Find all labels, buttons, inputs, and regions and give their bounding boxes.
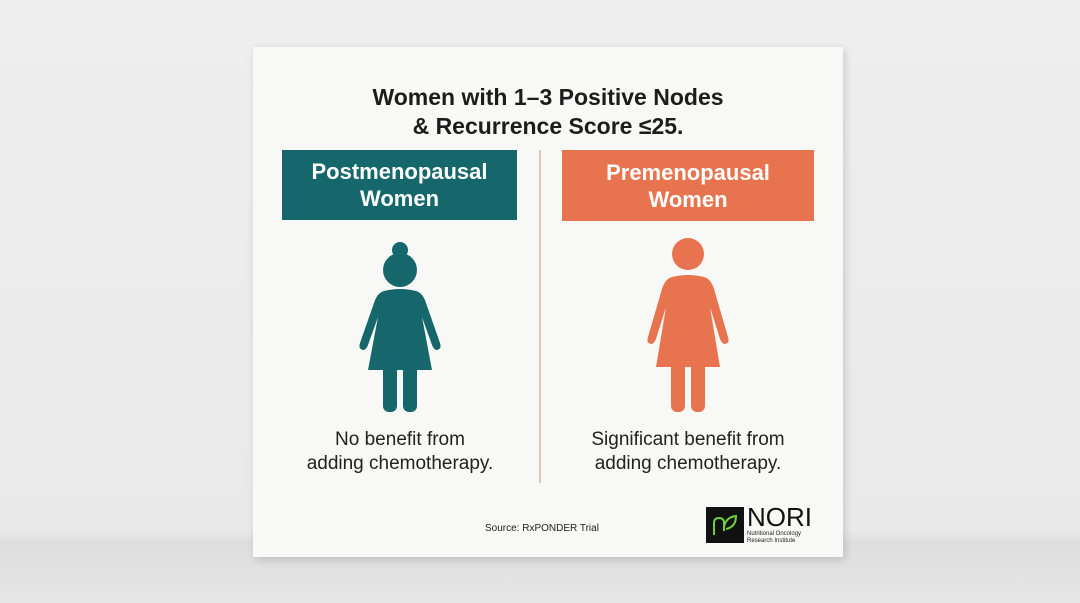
logo: NORI [706, 502, 812, 544]
caption: left: adding chemotherapy. [307, 453, 493, 474]
caption: left [307, 429, 493, 474]
header: premenopausal [562, 150, 814, 221]
header: premenopausal: Women [648, 186, 728, 212]
header: premenopausal: Premenopausal [606, 160, 770, 184]
header: postmenopausal: Women [360, 186, 439, 211]
divider [539, 150, 541, 483]
caption: right: adding chemotherapy. [595, 453, 781, 474]
icon: coral woman [647, 238, 729, 412]
title: Women with 1–3 Positive Nodes [372, 84, 724, 110]
title: & Recurrence Score ≤25. [413, 113, 683, 139]
logo: NORI: Nutritional Oncology [747, 531, 801, 537]
icon: leaf logo [706, 507, 744, 543]
icon: teal woman with bun [359, 242, 441, 412]
logo: NORI: NORI [747, 502, 812, 532]
caption: right: Significant benefit from [591, 429, 785, 450]
header: postmenopausal [282, 150, 517, 220]
caption: left: No benefit from [335, 429, 465, 450]
card [253, 47, 843, 557]
header: postmenopausal: Postmenopausal [311, 159, 488, 184]
source: Source: RxPONDER Trial [485, 523, 599, 534]
caption: right [591, 429, 785, 474]
title [372, 84, 724, 139]
logo: NORI: Research Institute [747, 538, 795, 544]
